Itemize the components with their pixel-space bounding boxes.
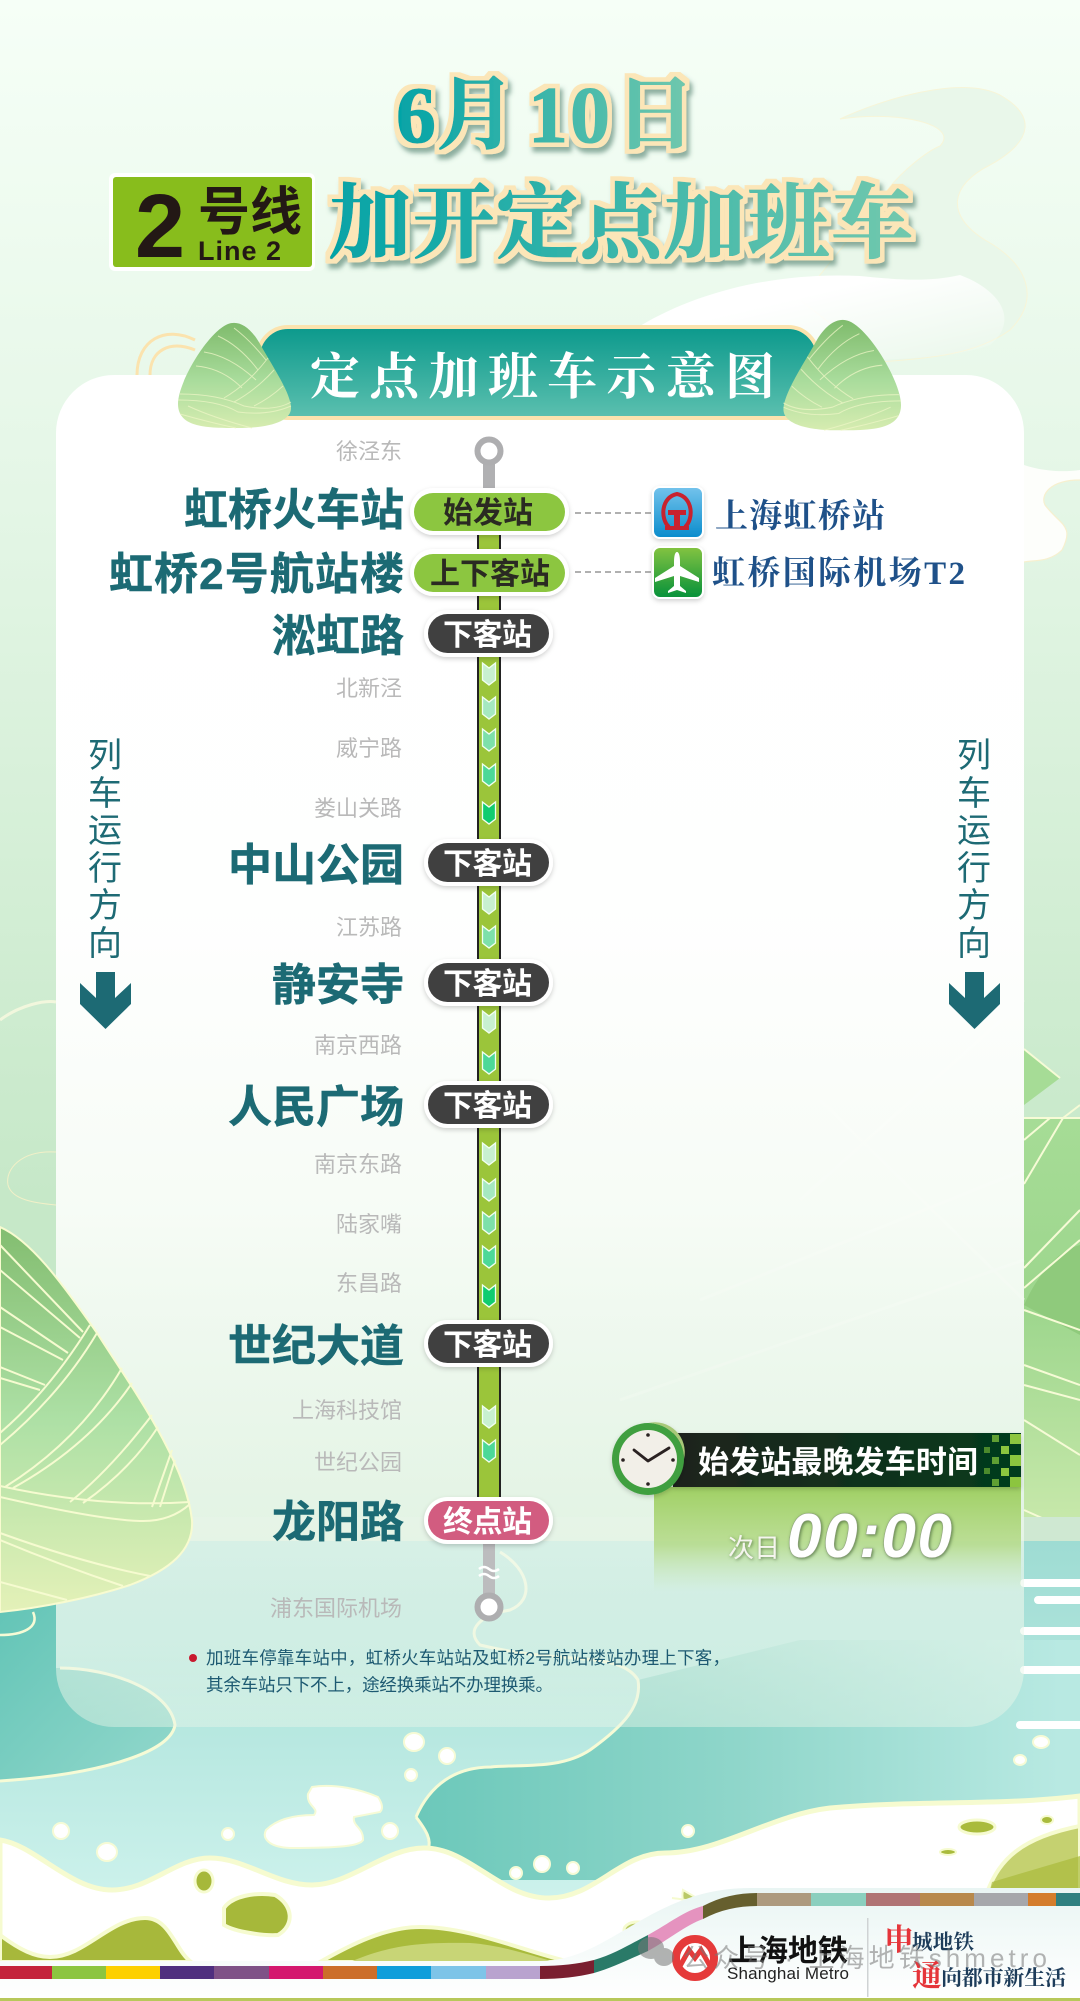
footnote: [189, 1648, 730, 1695]
line 2 badge: 号线: [198, 184, 302, 242]
footnote: 其余车站只下不上，途经换乘站不办理换乘。: [206, 1675, 553, 1695]
station pills: alight only: [424, 610, 553, 1367]
metro line colour band: [0, 1893, 1080, 1979]
icon: clock: [612, 1422, 685, 1495]
right rice dumpling behind panel: [620, 1000, 1080, 1541]
title: date: 6月10日: [396, 72, 695, 160]
station pills: alight only: 下客站: [443, 619, 532, 652]
last departure panel: 始发站最晚发车时间: [698, 1445, 978, 1480]
direction label left: 方: [88, 887, 122, 925]
station pill: board and alight: 上下客站: [430, 558, 550, 591]
grey pass-through station names: 威宁路: [336, 736, 402, 761]
foam dots and cloud: [53, 1733, 1049, 1879]
station pills: alight only: 下客站: [443, 1329, 532, 1362]
direction label right: 方: [957, 887, 991, 925]
last departure panel: 00:00: [787, 1502, 952, 1571]
slogan: 申: [884, 1924, 914, 1957]
icon: dumpling right: [783, 320, 901, 430]
main stop station names: [109, 486, 404, 1547]
direction label left: 向: [88, 925, 122, 963]
main stop station names: 虹桥2号航站楼: [109, 550, 404, 599]
station pill: origin: 始发站: [443, 497, 533, 530]
grey pass-through station names: 娄山关路: [314, 796, 402, 821]
slogan: 通: [912, 1960, 942, 1993]
water and waves: [0, 1517, 1080, 1901]
main stop station names: 静安寺: [272, 961, 404, 1010]
station pill: origin: [410, 488, 569, 535]
direction label right: 行: [957, 850, 991, 888]
label: Shanghai Hongqiao Station: 上海虹桥站: [715, 498, 885, 535]
main stop station names: 世纪大道: [228, 1322, 404, 1371]
station pill: terminus: 终点站: [443, 1506, 532, 1539]
grey pass-through station names: 世纪公园: [314, 1450, 402, 1475]
station pills: alight only: 下客站: [443, 1090, 532, 1123]
line 2 badge: [109, 173, 315, 277]
header banner: 定点加班车示意图: [310, 349, 775, 405]
direction label left: [88, 737, 122, 963]
Shanghai Metro logo: Shanghai Metro: [727, 1964, 849, 1983]
main stop station names: 淞虹路: [272, 612, 404, 661]
transfer connector lines: [575, 513, 652, 572]
grey pass-through station names: 浦东国际机场: [270, 1596, 402, 1621]
main white panel: [56, 375, 1024, 1727]
grey pass-through station names: 南京西路: [314, 1033, 402, 1058]
grey pass-through station names: 江苏路: [336, 915, 402, 940]
white wave foreground: [0, 1796, 1080, 2001]
grey pass-through station names: 上海科技馆: [292, 1398, 402, 1423]
line 2 badge: Line 2: [198, 236, 281, 266]
grey pass-through station names: 北新泾: [336, 676, 402, 701]
direction label left: 运: [88, 812, 122, 850]
station pill: terminus: [424, 1497, 553, 1544]
label: Hongqiao Airport T2: 虹桥国际机场T2: [712, 555, 965, 592]
grey pass-through station names: 陆家嘴: [336, 1212, 402, 1237]
direction label right: 车: [957, 775, 991, 813]
main stop station names: 龙阳路: [272, 1498, 404, 1547]
direction label right: [957, 737, 991, 963]
last departure panel: [654, 1433, 1021, 1592]
direction label right: 运: [957, 812, 991, 850]
station pills: alight only: 下客站: [443, 848, 532, 881]
main stop station names: 中山公园: [228, 841, 404, 890]
arrow right: [949, 972, 1000, 1029]
main stop station names: 虹桥火车站: [184, 486, 404, 535]
slogan: [867, 1918, 1066, 1997]
icon: airplane: [653, 547, 703, 598]
direction label left: 行: [88, 850, 122, 888]
grey pass-through station names: 徐泾东: [336, 439, 402, 464]
grey pass-through station names: [270, 439, 402, 1621]
watermark: 公众号 · 上海地铁shmetro: [683, 1943, 1047, 1973]
arrow left: [80, 972, 131, 1029]
left rice dumpling: [0, 1227, 192, 1612]
footer strip: [0, 1888, 1080, 1998]
Shanghai Metro logo: 上海地铁: [728, 1935, 848, 1968]
main stop station names: 人民广场: [228, 1083, 404, 1132]
direction chevrons: [482, 663, 496, 1462]
direction label right: 列: [957, 737, 991, 775]
direction label left: 车: [88, 775, 122, 813]
slogan: 向都市新生活: [941, 1966, 1066, 1990]
metro line track: [477, 440, 501, 1618]
icon: dumpling left: [178, 323, 291, 428]
line 2 badge: 2: [135, 177, 185, 277]
header banner: [258, 327, 818, 418]
footnote: 加班车停靠车站中，虹桥火车站站及虹桥2号航站楼站办理上下客，: [206, 1648, 730, 1668]
grey pass-through station names: 南京东路: [314, 1152, 402, 1177]
Shanghai Metro logo: [676, 1935, 849, 1983]
grey pass-through station names: 东昌路: [336, 1271, 402, 1296]
last departure panel: 次日: [728, 1533, 780, 1563]
title: extra trains: 加开定点加班车: [329, 178, 913, 269]
station pills: alight only: 下客站: [443, 968, 532, 1001]
direction label right: 向: [957, 925, 991, 963]
icon: railway: [653, 487, 703, 538]
slogan: 城地铁: [912, 1931, 974, 1954]
station pill: board and alight: [410, 549, 569, 596]
direction label left: 列: [88, 737, 122, 775]
